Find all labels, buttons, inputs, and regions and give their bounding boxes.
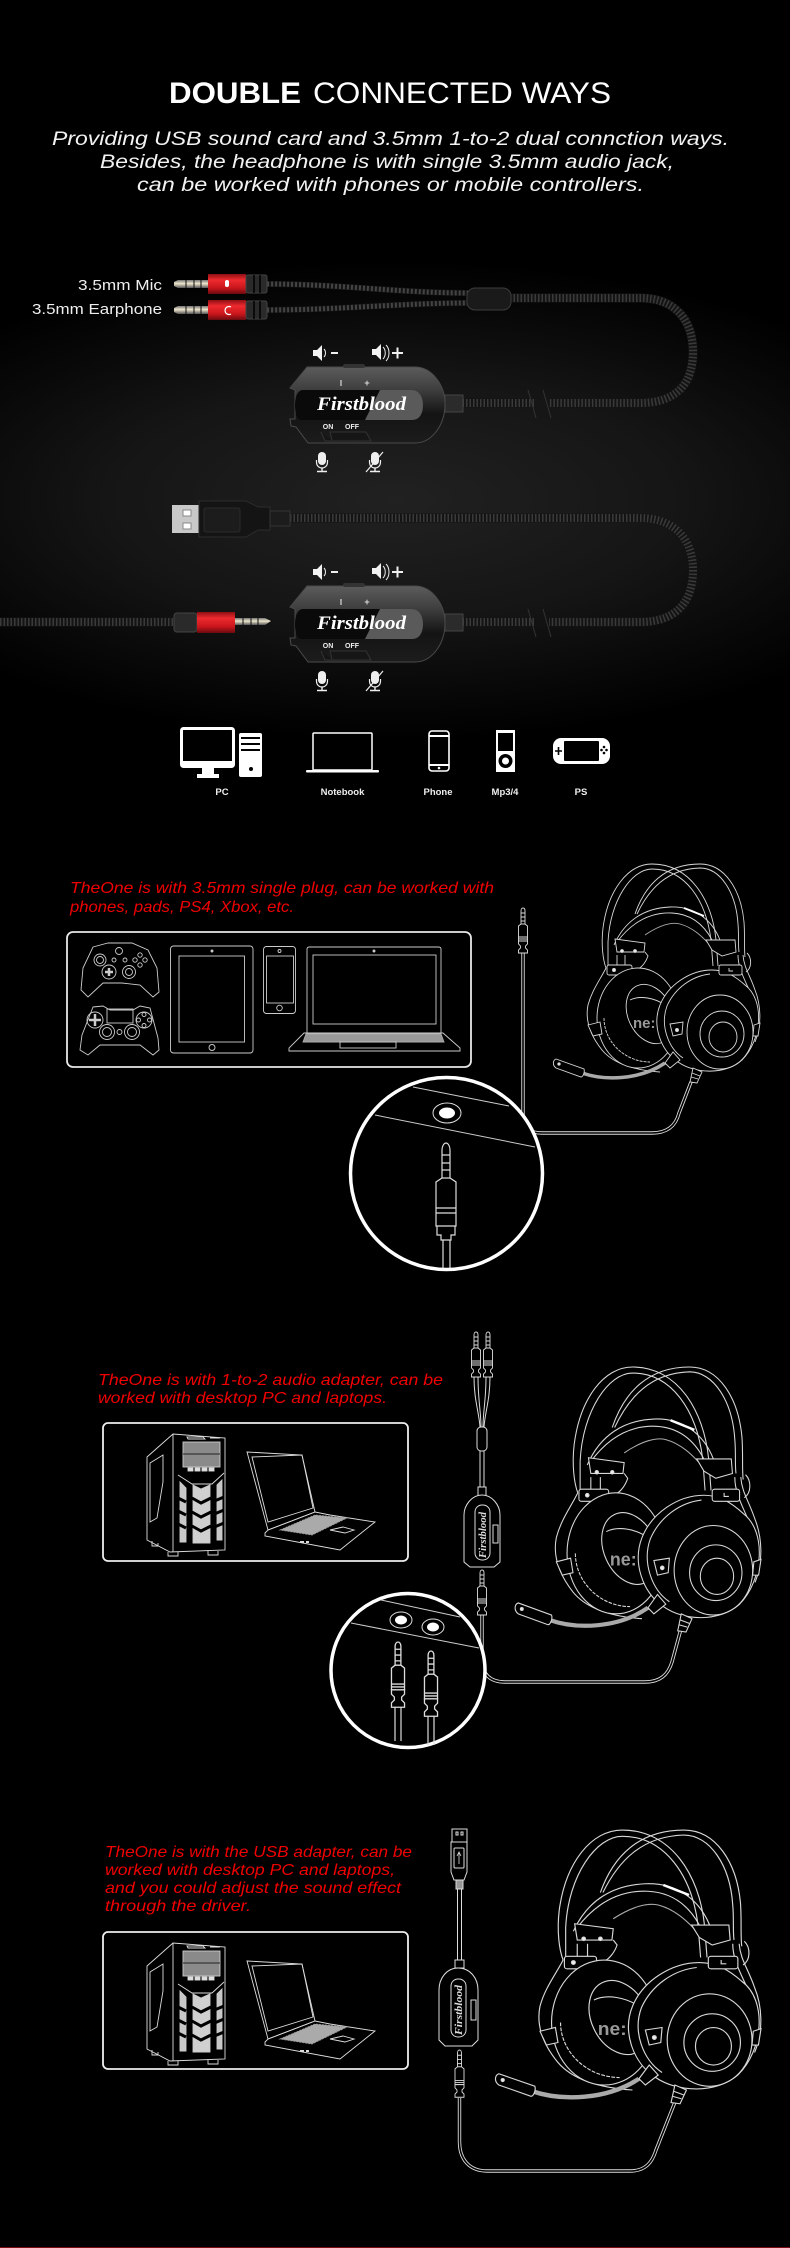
section 1 cable plug: [518, 908, 528, 953]
section 2 text: TheOne is with 1-to-2 audio adapter, can be: [98, 1372, 443, 1389]
icon: playstation gamepad: [80, 1006, 159, 1055]
section 2 headset cable: [482, 1615, 682, 1682]
icon: phone outline: [264, 946, 296, 1014]
section 2 headset: [515, 1367, 761, 1632]
title: DOUBLE: [169, 77, 301, 110]
section 2 adapter with plugs: [464, 1332, 500, 1615]
section 3 headset: [495, 1830, 761, 2104]
section 2 zoom circle: [331, 1594, 485, 1748]
module 1: [290, 364, 463, 443]
lower braided cable: [0, 518, 693, 637]
section 1 text: phones, pads, PS4, Xbox, etc.: [69, 899, 294, 916]
section 2 control module: Firstblood: [478, 1511, 489, 1559]
section 2 text: [98, 1372, 443, 1407]
section 2 panel: [103, 1423, 408, 1561]
device icon: Mp3/4: Mp3/4: [492, 787, 519, 798]
label: 3.5mm Earphone: 3.5mm Earphone: [32, 302, 162, 318]
section 3 USB adapter: [439, 1829, 478, 2097]
section 3 text: TheOne is with the USB adapter, can be: [105, 1844, 412, 1861]
section 3 panel: [103, 1932, 408, 2069]
device icon: Mp3/4: [492, 730, 519, 798]
section 1 headset: [553, 864, 760, 1083]
device icon: PC: [181, 728, 262, 798]
device icon: PC: PC: [215, 787, 229, 798]
device icon: PS: [553, 738, 610, 798]
icon: tablet: [170, 946, 253, 1053]
spotlight backdrop: [0, 240, 790, 760]
icon: xbox gamepad: [81, 943, 159, 997]
intro text: [52, 128, 729, 196]
module 1 volume icons: [313, 344, 403, 361]
section 1 zoom circle: [350, 1078, 542, 1270]
title: CONNECTED WAYS: [313, 77, 611, 110]
section 2 text: worked with desktop PC and laptops.: [98, 1390, 387, 1407]
section 3 text: [105, 1844, 412, 1915]
mic plug: [174, 274, 267, 294]
section 3 text: through the driver.: [105, 1898, 251, 1915]
module 2: [290, 583, 463, 662]
section 1 headset cable: [523, 953, 691, 1133]
earphone plug: [174, 300, 267, 320]
USB plug: [172, 501, 290, 537]
bottom rule: [0, 2247, 790, 2248]
icon: laptop outline: [289, 947, 460, 1051]
section 3 text: worked with desktop PC and laptops,: [105, 1862, 395, 1879]
section 3 control module: Firstblood: [454, 1984, 465, 2036]
device icon: Phone: Phone: [423, 787, 453, 798]
device icon: PS: PS: [575, 787, 587, 798]
intro text: Providing USB sound card and 3.5mm 1-to-2 dual connction ways.: [52, 128, 729, 150]
section 3 headset cable: [460, 2098, 675, 2171]
section 1 text: TheOne is with 3.5mm single plug, can be worked with: [70, 880, 494, 897]
3.5mm plug on lower cable: [174, 612, 271, 633]
cable joiner: [467, 288, 511, 310]
section 1 text: [69, 880, 494, 916]
device icon: Notebook: Notebook: [321, 787, 365, 798]
section 2 control module: [464, 1495, 500, 1567]
module 1 mic icons: [316, 452, 383, 472]
section 3 text: and you could adjust the sound effect: [105, 1880, 402, 1897]
intro text: can be worked with phones or mobile controllers.: [137, 174, 644, 196]
intro text: Besides, the headphone is with single 3.5mm audio jack,: [100, 151, 674, 173]
upper braided cable: [267, 284, 693, 418]
section 3 control module: [439, 1968, 478, 2046]
module 2 volume icons: [313, 563, 403, 580]
module 2 mic icons: [316, 671, 383, 691]
device icon: Notebook: [306, 733, 379, 798]
title: [169, 77, 611, 110]
device icon: Phone: [423, 731, 453, 798]
label: 3.5mm Mic: 3.5mm Mic: [78, 278, 162, 294]
section 1 panel: [67, 932, 471, 1067]
